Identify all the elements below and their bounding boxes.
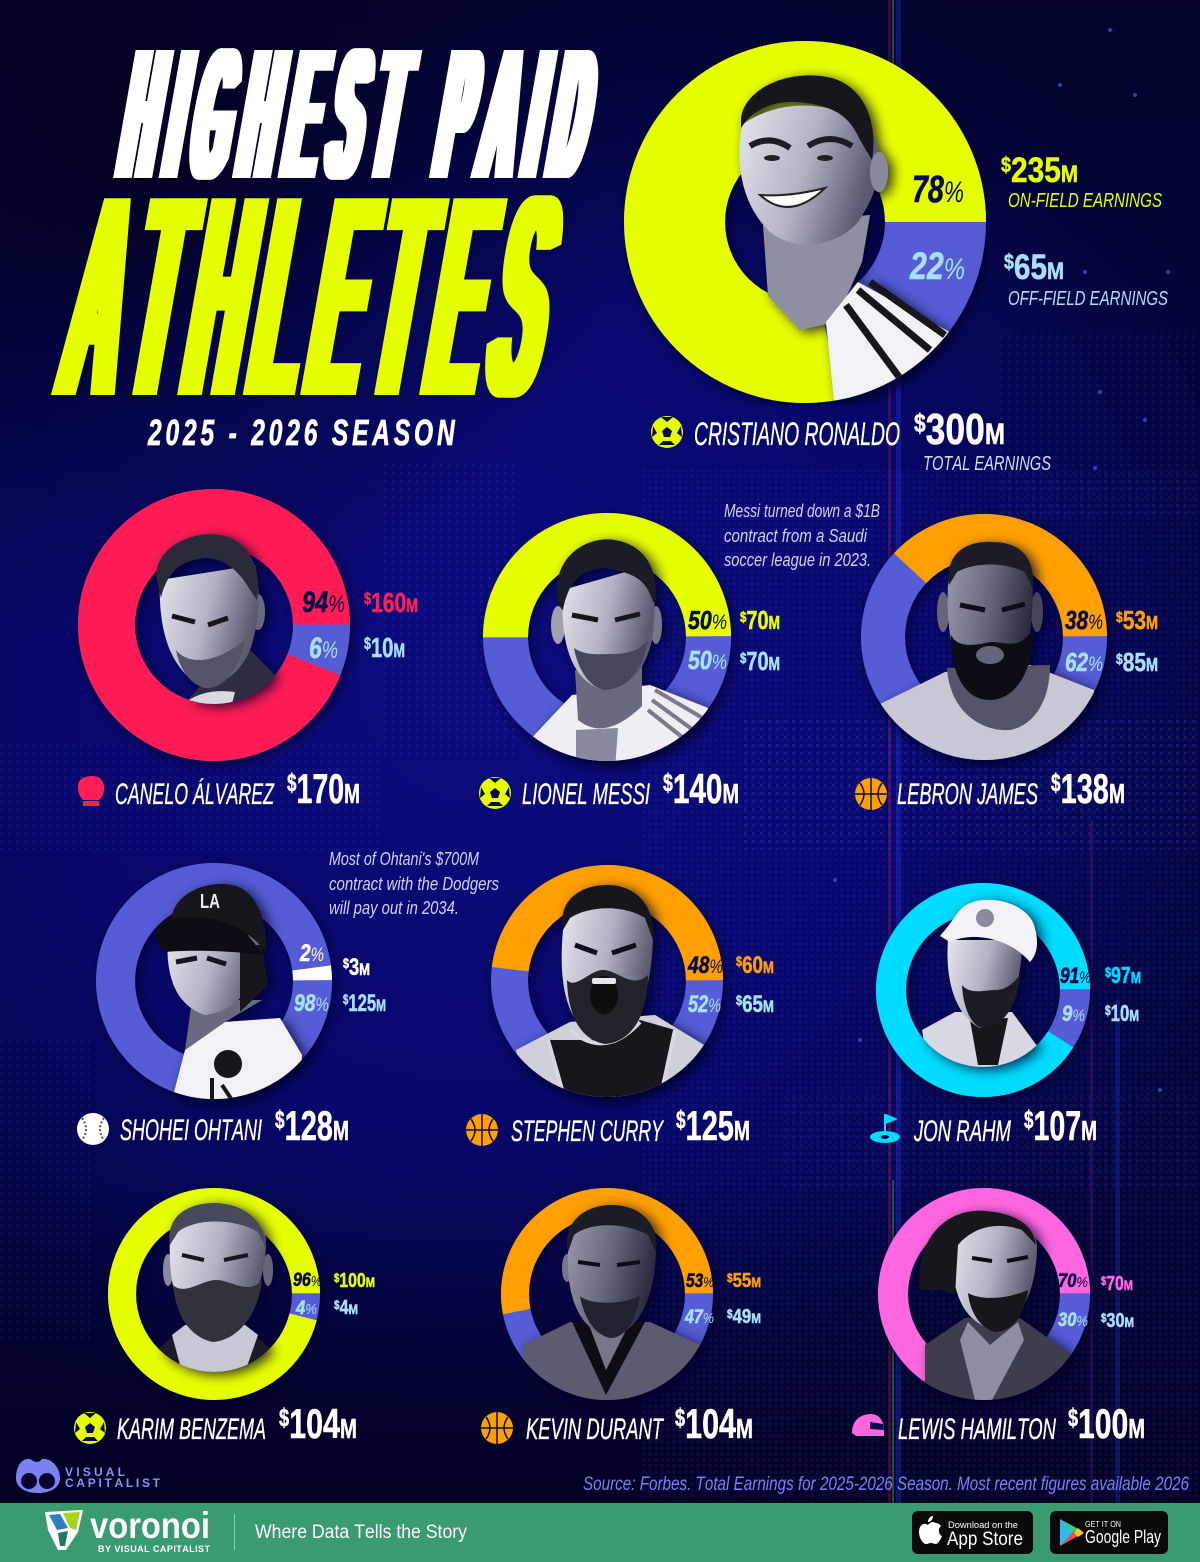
photo: Durant: [523, 1205, 700, 1405]
photo: Ohtani: [156, 884, 302, 1100]
note: contract with the Dodgers: [329, 874, 499, 894]
total: 138: [1061, 765, 1109, 812]
total: 128: [285, 1102, 333, 1149]
total: M: [722, 778, 739, 809]
total: M: [333, 1115, 349, 1146]
on-field value: $: [334, 1271, 340, 1285]
panel: Hamilton: [852, 1203, 1145, 1447]
on-field value: 100: [339, 1270, 366, 1292]
donut: LeBron: [883, 536, 1085, 738]
off-field value: 49: [733, 1306, 751, 1328]
icon: boxing glove: [78, 776, 104, 806]
photo: Ronaldo: [739, 75, 955, 410]
off-field value: $: [334, 1298, 340, 1312]
off-field value: $: [343, 991, 349, 1007]
name: STEPHEN CURRY: [511, 1115, 664, 1148]
on-field value: M: [751, 1274, 761, 1290]
photo: Hamilton: [919, 1211, 1072, 1400]
app store badge: [912, 1511, 1033, 1554]
photo: Curry: [516, 885, 704, 1100]
on-field value: 70: [746, 605, 769, 635]
94%: 94%: [302, 586, 345, 619]
note: contract from a Saudi: [724, 526, 868, 546]
on-field value: M: [406, 596, 418, 617]
off-field value: $: [364, 634, 371, 653]
total: $: [287, 769, 297, 797]
total: 100: [1078, 1400, 1128, 1447]
donut: Benzema: [122, 1202, 306, 1386]
off-field value: $: [1105, 1002, 1111, 1018]
4%: 4%: [295, 1298, 317, 1319]
off-field value: 85: [1123, 647, 1146, 677]
footer bar: [0, 1503, 1200, 1562]
70%: 70%: [1058, 1271, 1088, 1292]
53%: 53%: [686, 1271, 714, 1292]
total: $: [1051, 769, 1061, 797]
total: $: [275, 1106, 285, 1134]
on-field value: M: [366, 1274, 375, 1290]
tagline: Where Data Tells the Story: [255, 1522, 467, 1543]
48%: 48%: [687, 952, 723, 979]
off-field value: 70: [746, 646, 769, 676]
name: LEWIS HAMILTON: [898, 1413, 1056, 1446]
google play badge: Google Play: [1085, 1527, 1161, 1547]
on-field value: 70: [1106, 1273, 1124, 1295]
app store badge: App Store: [947, 1529, 1023, 1550]
icon: baseball: [77, 1113, 109, 1145]
off-field value: M: [1047, 258, 1064, 285]
panel: Durant: [481, 1202, 761, 1447]
name: KARIM BENZEMA: [117, 1413, 266, 1446]
total label: TOTAL EARNINGS: [923, 453, 1051, 475]
total: 170: [296, 765, 344, 812]
on-field value: 55: [733, 1270, 751, 1292]
off-field value: $: [727, 1307, 733, 1321]
total: M: [734, 1115, 750, 1146]
off-field value: M: [751, 1310, 761, 1326]
on-field value: M: [1124, 1277, 1133, 1293]
on-field value: 53: [1123, 605, 1146, 635]
photo: Benzema: [145, 1203, 285, 1380]
panel: Curry: [466, 884, 774, 1149]
off-field value: $: [1101, 1311, 1107, 1325]
photo: Rahm: [922, 900, 1040, 1075]
50%: 50%: [688, 605, 727, 635]
total: $: [279, 1404, 289, 1432]
off-field value: 10: [371, 632, 394, 663]
name: SHOHEI OHTANI: [120, 1114, 262, 1147]
icon: basketball: [466, 1114, 498, 1146]
on-field value: $: [727, 1271, 733, 1285]
total: $: [676, 1106, 686, 1134]
total: $: [1024, 1106, 1034, 1134]
name: CANELO ÁLVAREZ: [115, 778, 275, 811]
on-field value: M: [1061, 161, 1078, 188]
38%: 38%: [1065, 605, 1103, 635]
app store badge: Download on the: [948, 1520, 1018, 1530]
total: $: [1068, 1404, 1078, 1432]
off-field value: M: [769, 654, 780, 674]
google play badge: GET IT ON: [1085, 1520, 1121, 1529]
donut: Canelo: [106, 518, 322, 732]
name: CRISTIANO RONALDO: [694, 416, 900, 452]
panel: Benzema: [74, 1202, 375, 1447]
off-field value: M: [1129, 1008, 1139, 1025]
name: KEVIN DURANT: [526, 1413, 665, 1446]
47%: 47%: [684, 1307, 714, 1328]
total: M: [340, 1413, 357, 1444]
voronoi logo: [45, 1505, 210, 1554]
total: 300: [926, 405, 985, 454]
total: 140: [673, 765, 722, 812]
78%: 78%: [912, 169, 964, 211]
off-field value: 30: [1106, 1310, 1125, 1332]
name: JON RAHM: [913, 1115, 1011, 1148]
total: M: [985, 418, 1005, 451]
icon: soccer ball: [479, 777, 511, 809]
off-field value: M: [394, 641, 405, 662]
2%: 2%: [299, 940, 324, 967]
on-field value: M: [769, 613, 780, 633]
98%: 98%: [294, 990, 329, 1017]
off-field value: 125: [348, 990, 376, 1017]
on-field value: M: [1146, 613, 1158, 633]
on-field value: $: [343, 955, 349, 971]
note: soccer league in 2023.: [724, 550, 871, 570]
donut: Hamilton: [893, 1203, 1075, 1385]
off-field value: M: [763, 997, 774, 1016]
on-field value: $: [736, 953, 742, 969]
on-field value: $: [364, 589, 371, 608]
google play badge: [1050, 1511, 1168, 1554]
96%: 96%: [293, 1270, 322, 1291]
off-field value: $: [736, 992, 742, 1008]
donut: Curry: [510, 884, 704, 1078]
total: $: [663, 769, 673, 797]
title: HIGHEST PAID: [109, 12, 620, 219]
note: Messi turned down a $1B: [724, 501, 880, 521]
panel: Rahm: [870, 898, 1141, 1149]
30%: 30%: [1058, 1310, 1088, 1331]
icon: golf flag: [870, 1114, 900, 1143]
photo: LeBron: [878, 542, 1100, 770]
donut: Rahm: [891, 898, 1075, 1082]
name: LIONEL MESSI: [522, 778, 650, 811]
subtitle: 2025 - 2026 SEASON: [147, 412, 458, 453]
off-field value: $: [740, 650, 747, 667]
voronoi logo: voronoi: [90, 1505, 210, 1546]
on-field value: $: [1101, 1274, 1107, 1288]
icon: soccer ball: [74, 1412, 106, 1444]
note: Most of Ohtani's $700M: [329, 849, 479, 869]
panel: Messi: [479, 501, 880, 812]
total: M: [1081, 1115, 1097, 1146]
total: M: [1128, 1413, 1145, 1444]
photo: Canelo: [157, 534, 290, 712]
logo: Visual Capitalist: CAPITALIST: [65, 1476, 161, 1490]
62%: 62%: [1065, 647, 1103, 677]
off-field value: $: [1004, 251, 1014, 274]
22%: 22%: [909, 246, 965, 288]
total: $: [914, 408, 926, 438]
panel: Canelo: [78, 518, 418, 812]
donut: Ronaldo: [674, 92, 936, 352]
total: 107: [1033, 1102, 1081, 1149]
icon: racing helmet: [852, 1414, 884, 1436]
on-field value: 97: [1111, 962, 1131, 988]
on-field value: M: [1131, 970, 1141, 987]
title: ATHLETES: [45, 136, 590, 456]
on-field value: 160: [371, 587, 406, 618]
total: 125: [686, 1102, 734, 1149]
on-field value: M: [359, 960, 370, 979]
off-field value: $: [1116, 651, 1123, 668]
total: 104: [685, 1400, 737, 1447]
panel: Ohtani: [77, 849, 499, 1149]
on-field value: 60: [742, 952, 763, 979]
off-field value: 65: [1014, 248, 1047, 287]
6%: 6%: [309, 632, 338, 665]
voronoi logo: BY VISUAL CAPITALIST: [98, 1544, 210, 1554]
52%: 52%: [688, 991, 721, 1018]
icon: soccer ball: [651, 416, 683, 448]
on-field value: $: [1116, 609, 1123, 626]
on-field value: 235: [1011, 151, 1061, 190]
on-field value: $: [1105, 964, 1111, 980]
donut: Ohtani: [116, 882, 312, 1080]
total: 104: [289, 1400, 341, 1447]
off-field value: 4: [339, 1297, 349, 1319]
off-field value: M: [1125, 1314, 1134, 1330]
off-field value: M: [348, 1301, 358, 1317]
50%: 50%: [688, 645, 727, 675]
logo: Visual Capitalist: [16, 1459, 161, 1493]
donut: Messi: [506, 536, 708, 738]
on-field value: M: [763, 958, 774, 977]
total: M: [1109, 778, 1125, 809]
icon: basketball: [481, 1412, 513, 1444]
off-field value: 65: [742, 991, 763, 1018]
donut: Durant: [515, 1202, 699, 1386]
on-field value: 3: [349, 954, 359, 981]
off-field value: M: [376, 996, 386, 1015]
91%: 91%: [1060, 963, 1091, 988]
total: $: [675, 1404, 685, 1432]
off-field value: M: [1146, 655, 1158, 675]
on-field value: $: [740, 609, 747, 626]
logo: Visual Capitalist: VISUAL: [65, 1465, 125, 1479]
name: LEBRON JAMES: [897, 778, 1038, 811]
off-field value: 10: [1111, 1000, 1129, 1026]
note: will pay out in 2034.: [329, 898, 459, 918]
icon: basketball: [855, 778, 887, 810]
on-field value: $: [1001, 154, 1011, 177]
panel: LeBron: [855, 536, 1158, 812]
title: [45, 12, 620, 456]
total: M: [344, 778, 360, 809]
panel: Ronaldo: [651, 75, 1168, 475]
photo: Messi: [525, 539, 708, 770]
9%: 9%: [1062, 1001, 1085, 1026]
photo: Ohtani: LA: [200, 891, 220, 913]
total: M: [736, 1413, 753, 1444]
